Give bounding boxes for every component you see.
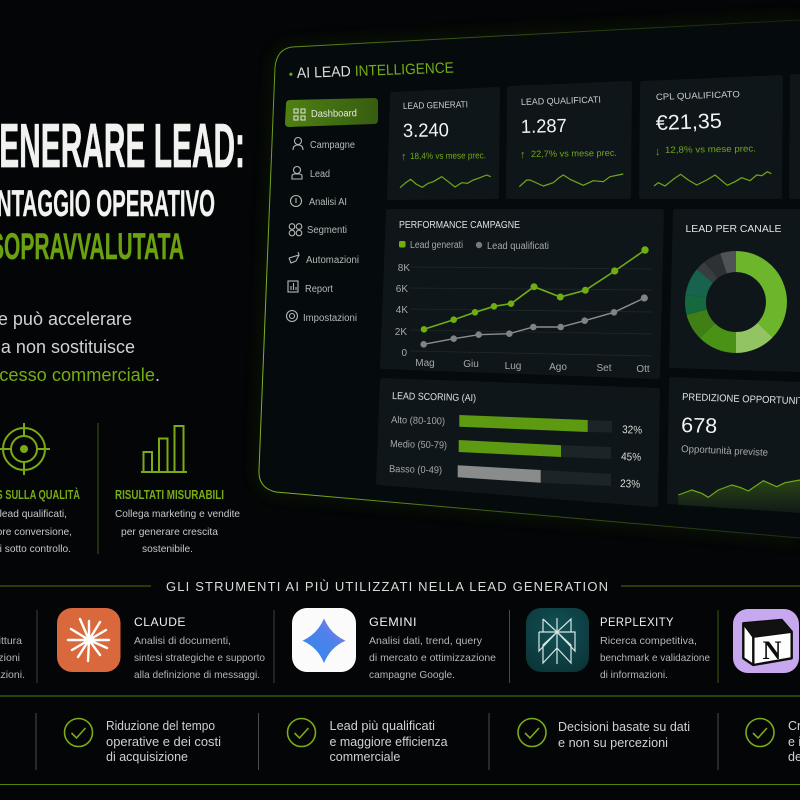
dashboard title: AI LEAD <box>297 63 351 82</box>
benefit: decisioni basate su dati: Decisioni basate su dati <box>558 720 690 734</box>
panel: lead scoring <box>376 378 660 507</box>
item: Report: Report <box>305 284 333 295</box>
tool: Claude: Analisi di documenti, <box>134 635 231 647</box>
score row: alto: 32% <box>622 424 642 437</box>
line chart: Ago <box>549 362 567 373</box>
line chart: 8K <box>398 263 410 274</box>
tool: Claude: alla definizione di messaggi. <box>134 669 260 681</box>
benefit: crescita <box>746 718 800 764</box>
dashboard title: INTELLIGENCE <box>355 60 454 80</box>
icon: Perplexity <box>526 608 589 672</box>
score row: alto <box>391 415 642 437</box>
panel: predizione opportunità: 678 <box>681 414 717 438</box>
item: Impostazioni: Impostazioni <box>303 313 357 324</box>
panel: performance campagne: PERFORMANCE CAMPAGNE <box>399 220 520 231</box>
tool: Notion: N <box>763 636 782 665</box>
benefits band <box>0 696 800 784</box>
feature: focus sulla qualità <box>0 423 80 555</box>
item: Segmenti <box>289 224 347 236</box>
chart legend: Lead generati <box>410 240 463 251</box>
feature: risultati misurabili: RISULTATI MISURABILI <box>115 487 224 502</box>
KPI card: lead qualificati: 22,7% vs mese prec. <box>531 148 617 159</box>
benefit: riduzione tempo: Riduzione del tempo <box>106 719 215 733</box>
icon: bar chart <box>141 426 187 472</box>
KPI card: lead generati: 3.240 <box>403 120 449 142</box>
item: Automazioni <box>289 252 359 266</box>
icon: Gemini <box>292 608 356 672</box>
section heading: strumenti AI: GLI STRUMENTI AI PIÙ UTILIZZATI NELLA LEAD GENERATION <box>166 579 608 594</box>
KPI card: cropped fourth card <box>789 74 800 199</box>
benefit: riduzione tempo: operative e dei costi <box>106 735 221 749</box>
feature: risultati misurabili: per generare crescita <box>121 527 218 538</box>
tool: Gemini: Analisi dati, trend, query <box>369 635 483 647</box>
tool: Claude <box>57 608 265 681</box>
dashboard panel <box>259 20 800 538</box>
KPI card: lead generati: 18,4% vs mese prec. <box>410 150 486 161</box>
KPI card: lead qualificati: 1.287 <box>521 116 567 138</box>
benefit: decisioni basate su dati <box>518 718 690 750</box>
item: Automazioni: Automazioni <box>306 255 359 266</box>
benefit: lead più qualificati: commerciale <box>330 750 400 764</box>
tool: Notion <box>733 609 799 673</box>
KPI card: CPL qualificato: €21,35 <box>655 110 722 135</box>
feature: risultati misurabili: Collega marketing e vendite <box>115 509 240 520</box>
KPI card: lead qualificati: LEAD QUALIFICATI <box>521 94 601 107</box>
line chart: Ott <box>636 364 650 375</box>
score row: basso: Basso (0-49) <box>389 464 442 476</box>
benefit: riduzione tempo: di acquisizione <box>106 750 188 764</box>
line chart <box>395 246 652 375</box>
chart legend <box>399 240 549 252</box>
tool: cropped first tool text <box>0 635 25 681</box>
KPI card: CPL qualificato: ↓ <box>655 146 660 158</box>
item: Analisi AI: Analisi AI <box>309 197 347 208</box>
KPI card: lead qualificati <box>506 81 632 199</box>
item: Campagne <box>293 138 355 151</box>
panel: lead per canale <box>669 209 800 372</box>
tool: Claude: sintesi strategiche e supporto <box>134 652 265 664</box>
tool: Claude: CLAUDE <box>134 615 186 629</box>
main heading <box>0 112 245 267</box>
active item: Dashboard: Dashboard <box>311 108 357 120</box>
panel: performance campagne <box>380 209 664 379</box>
line chart: Set <box>596 363 612 374</box>
KPI card: lead generati: ↑ <box>401 151 406 163</box>
area sparkline <box>678 480 800 513</box>
score row: medio: Medio (50-79) <box>390 439 447 451</box>
KPI card: lead generati: LEAD GENERATI <box>403 99 468 111</box>
tool: Perplexity: benchmark e validazione <box>600 652 710 664</box>
feature: risultati misurabili <box>115 426 240 555</box>
panel: lead scoring: LEAD SCORING (AI) <box>392 391 476 404</box>
tool: Perplexity <box>526 608 710 681</box>
item: Segmenti: Segmenti <box>307 225 347 236</box>
score row: basso <box>389 464 640 491</box>
benefit: lead più qualificati: Lead più qualificati <box>330 719 435 733</box>
tool: Gemini: campagne Google. <box>369 669 455 681</box>
chart legend: Lead qualificati <box>487 241 549 252</box>
KPI card: CPL qualificato: 12,8% vs mese prec. <box>665 143 756 155</box>
sidebar navigation <box>285 98 378 324</box>
tool: Perplexity: di informazioni. <box>600 669 668 681</box>
item: Analisi AI <box>290 196 347 208</box>
tool: Gemini: GEMINI <box>369 615 417 629</box>
panel: lead per canale: LEAD PER CANALE <box>686 224 782 235</box>
benefit: riduzione tempo <box>64 718 221 764</box>
score row: medio: 45% <box>621 451 641 464</box>
active item: Dashboard <box>285 98 378 127</box>
tool: Gemini <box>292 608 496 681</box>
line chart: 0 <box>401 348 407 359</box>
line chart: Lug <box>505 361 521 372</box>
main heading: SOPRAVVALUTATA <box>0 226 184 267</box>
icon: Claude <box>57 608 120 672</box>
benefit: decisioni basate su dati: e non su percezioni <box>558 736 668 750</box>
panel: predizione opportunità <box>667 377 800 513</box>
donut chart <box>695 262 776 342</box>
KPI card: CPL qualificato <box>639 75 783 199</box>
score row: medio <box>390 439 641 464</box>
tool: Perplexity: PERPLEXITY <box>600 615 674 629</box>
icon: target <box>0 423 50 475</box>
tool: Gemini: di mercato e ottimizzazione <box>369 652 496 664</box>
line chart: 2K <box>395 327 407 338</box>
item: Lead <box>292 166 330 180</box>
score row: alto: Alto (80-100) <box>391 415 445 427</box>
feature: risultati misurabili: sostenibile. <box>142 544 193 555</box>
line chart: 6K <box>396 284 408 295</box>
item: Report <box>288 281 333 295</box>
tool: Perplexity: Ricerca competitiva, <box>600 635 697 647</box>
benefit: lead più qualificati <box>288 718 448 764</box>
benefit: lead più qualificati: e maggiore efficienza <box>330 735 448 749</box>
dashboard title <box>289 60 454 82</box>
KPI card: lead qualificati: ↑ <box>520 149 526 161</box>
item: Lead: Lead <box>310 169 330 180</box>
item: Campagne: Campagne <box>310 140 355 151</box>
KPI card: CPL qualificato: CPL QUALIFICATO <box>656 89 740 102</box>
item: Impostazioni <box>286 310 357 324</box>
score row: basso: 23% <box>620 478 640 491</box>
KPI card: lead generati <box>387 87 500 200</box>
line chart: Giu <box>463 359 479 370</box>
intro paragraph <box>0 309 160 385</box>
line chart: 4K <box>396 305 408 316</box>
line chart: Mag <box>415 358 435 369</box>
panel: predizione opportunità: Opportunità previste <box>681 444 769 459</box>
